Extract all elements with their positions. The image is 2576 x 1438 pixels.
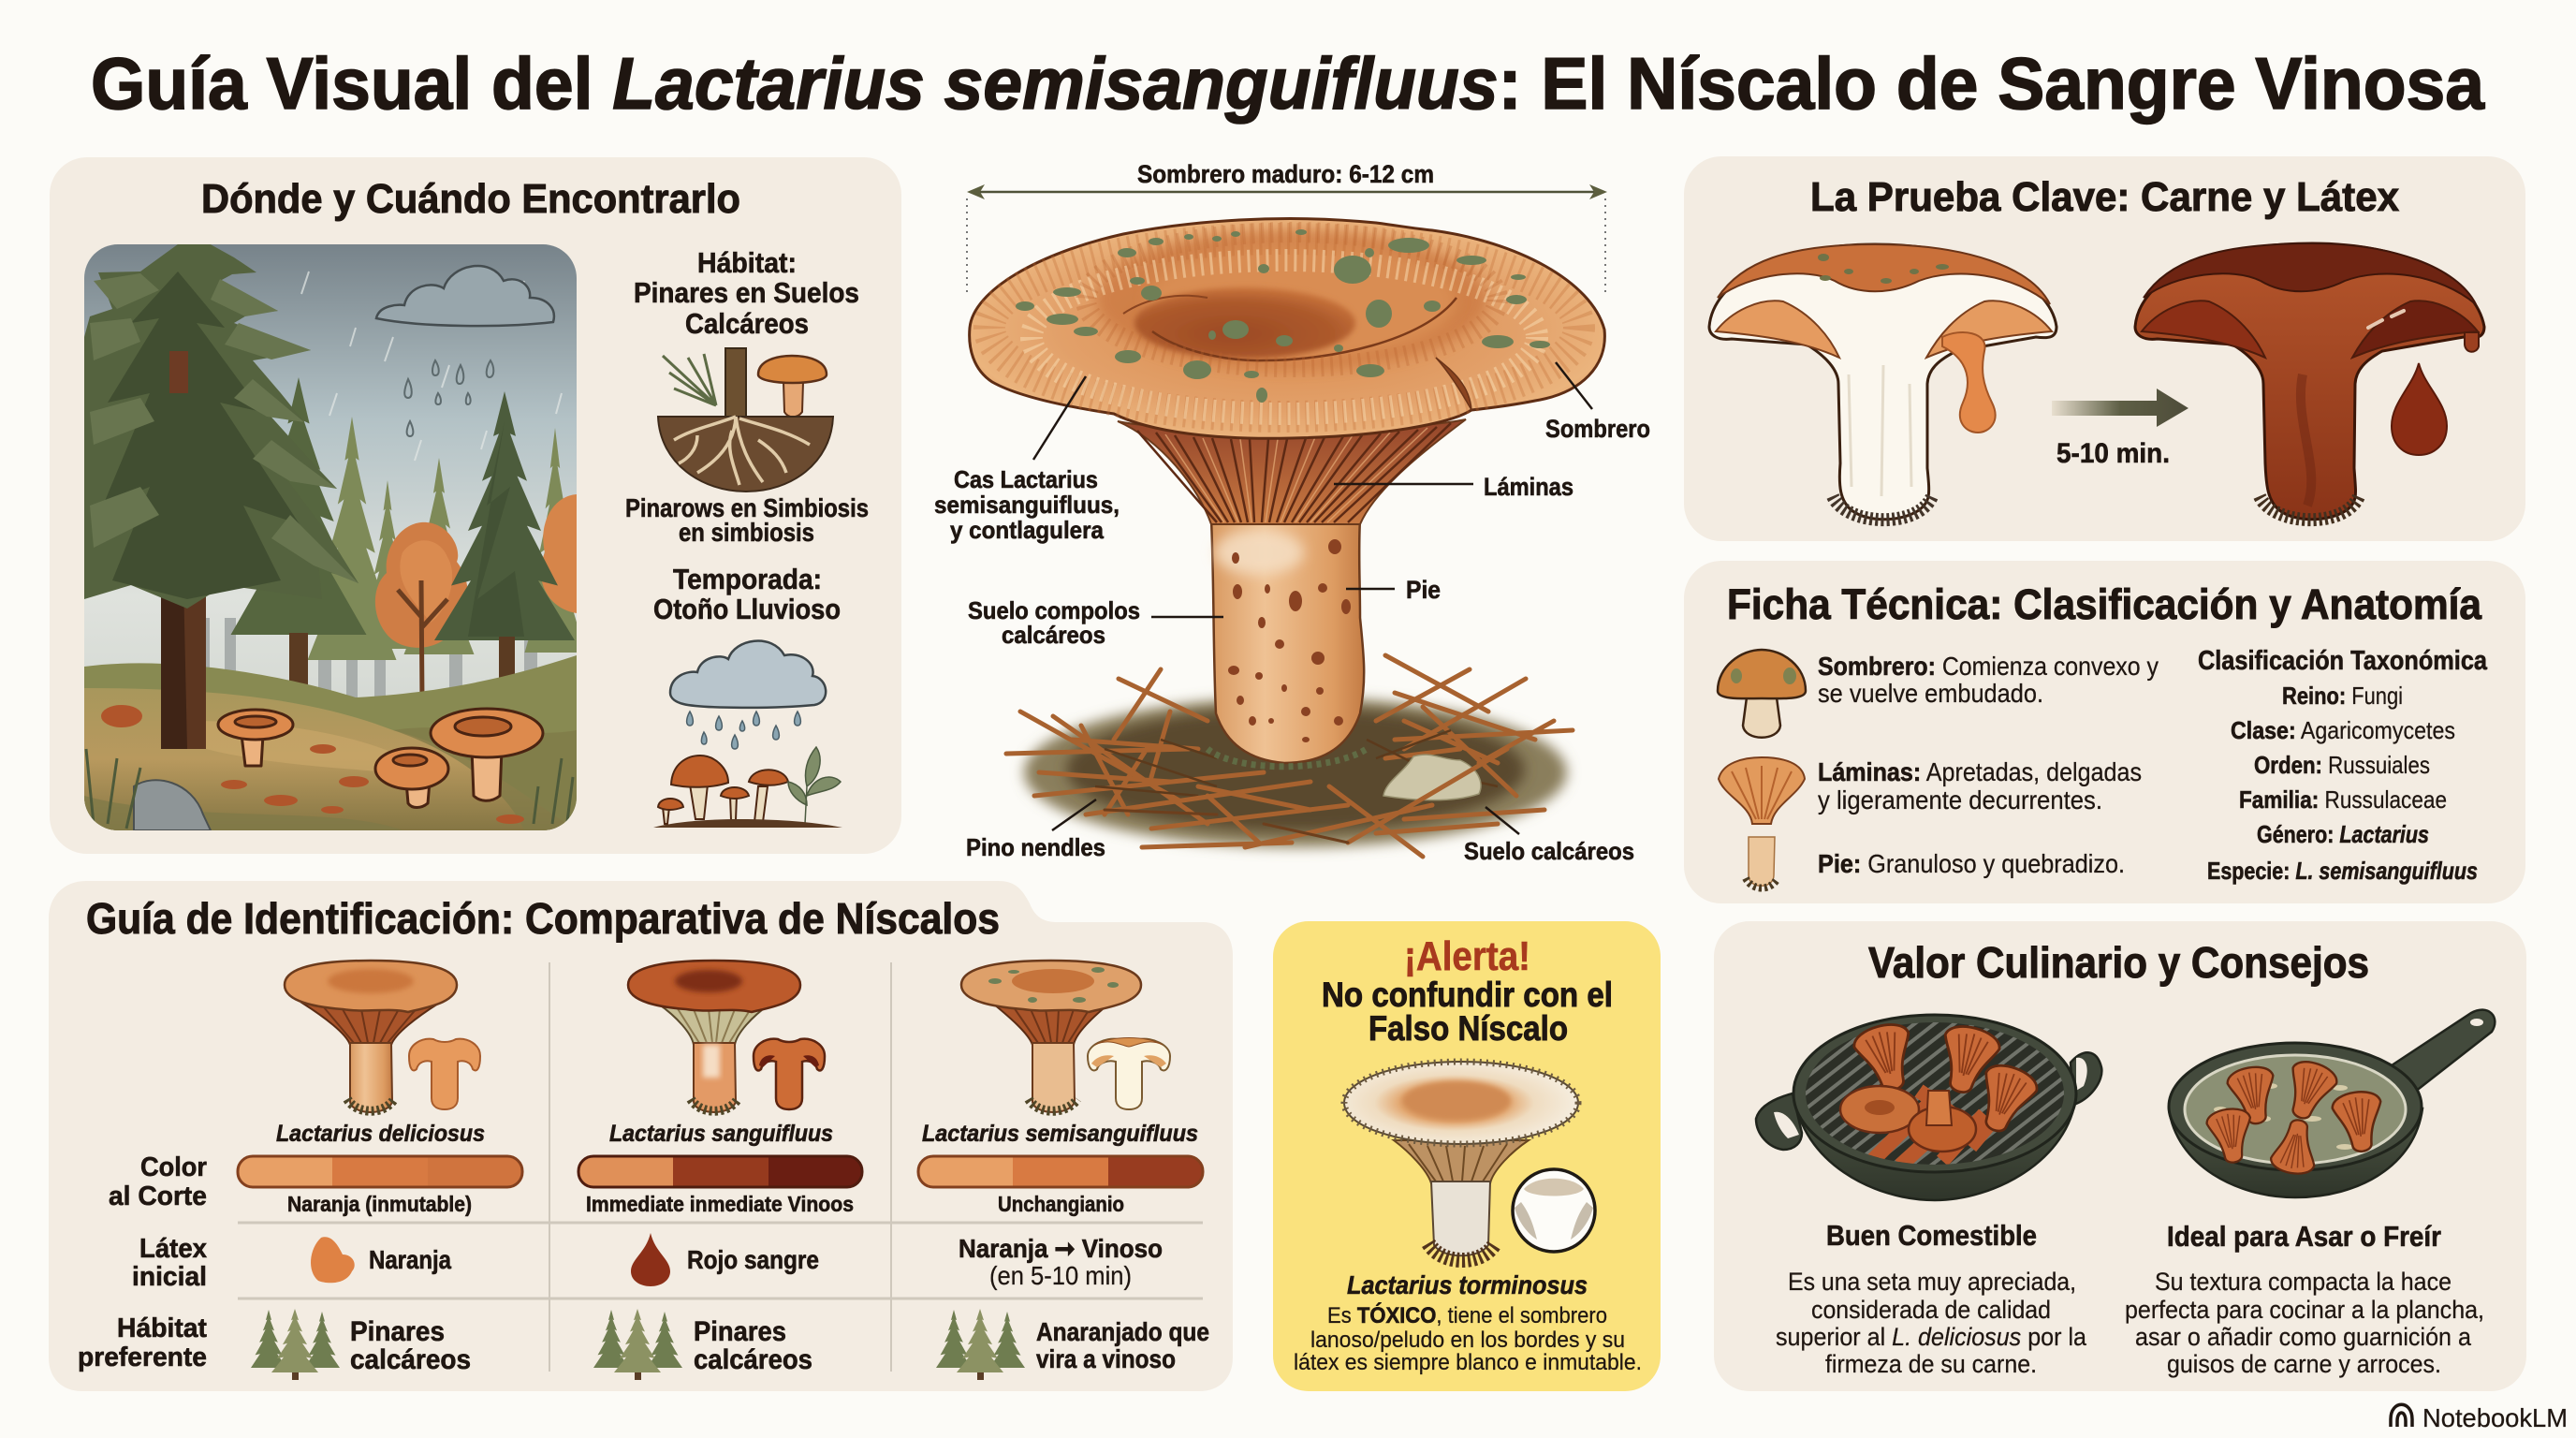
label: suelo compolos: calcáreos — [1002, 621, 1105, 649]
cross-section: sanguifluus — [754, 1039, 825, 1109]
row labels: Hábitat — [117, 1313, 207, 1343]
label: láminas: Láminas — [1484, 473, 1573, 501]
label: sombrero: Sombrero — [1545, 415, 1650, 443]
column: ideal para asar: Su textura compacta la hace — [2155, 1268, 2452, 1296]
foreground pine — [84, 365, 120, 501]
label: pinarows en simbiosis: Pinarows en Simbiosis — [625, 493, 869, 522]
taxonomy list: Especie: L. semisanguifluus — [2207, 857, 2478, 885]
forest mushrooms — [218, 709, 543, 807]
label: hábitat: Hábitat: — [697, 246, 797, 279]
oxidised mushroom — [2135, 243, 2484, 520]
species name: Lactarius sanguifluus — [609, 1121, 833, 1147]
icon: orange latex — [311, 1237, 355, 1283]
label: pinarows en simbiosis: en simbiosis — [679, 518, 814, 547]
cross-section with white latex — [1513, 1169, 1595, 1252]
anatomy text — [1818, 652, 2159, 878]
gills — [1118, 419, 1466, 524]
size dimension line — [967, 160, 1607, 292]
habitat label — [1036, 1317, 1209, 1373]
icon: pines — [593, 1309, 682, 1380]
anatomy text: y ligeramente decurrentes. — [1818, 785, 2102, 814]
label: cas lactarius: y contlagulera — [950, 516, 1104, 544]
alert text: lanoso/peludo en los bordes y su — [1310, 1328, 1625, 1353]
label: hábitat — [634, 246, 859, 340]
autumn tree right edge — [541, 494, 577, 613]
rock and grass — [134, 780, 211, 830]
alert heading — [1322, 933, 1613, 1048]
taxonomy list: Género: Lactarius — [2257, 820, 2429, 848]
panel: guía de identificación — [49, 881, 1233, 1391]
panel: dónde y cuándo — [50, 157, 901, 854]
annotation leader lines — [1033, 362, 1592, 834]
central mushroom diagram — [934, 160, 1650, 865]
label: temporada — [653, 563, 841, 625]
taxonomy list: Reino: Fungi — [2282, 682, 2403, 710]
icon: pie — [1746, 837, 1778, 888]
latex label: Naranja — [369, 1245, 451, 1274]
latex label: Naranja ➞ Vinoso — [959, 1234, 1163, 1263]
icon: rain cloud over mushrooms — [653, 641, 842, 828]
alert heading: No confundir con el — [1322, 976, 1613, 1014]
icon: grill pan with mushrooms — [1756, 1015, 2101, 1200]
heading: valor culinario: Valor Culinario y Consejos — [1868, 938, 2369, 987]
row labels: inicial — [132, 1262, 207, 1292]
heading: dónde y cuándo: Dónde y Cuándo Encontrarlo — [201, 176, 740, 222]
mushroom: lactarius torminosus — [1344, 1062, 1578, 1260]
label: hábitat: Calcáreos — [685, 307, 809, 340]
latex label: (en 5-10 min) — [989, 1261, 1132, 1290]
heading: la prueba clave: La Prueba Clave: Carne y Látex — [1810, 174, 2399, 220]
label: pino nendles: Pino nendles — [966, 833, 1105, 861]
label: 5-10 min: 5-10 min. — [2056, 438, 2170, 469]
panel: ficha técnica — [1684, 561, 2525, 903]
taxonomy list: Familia: Russulaceae — [2239, 785, 2447, 814]
column: ideal para asar: perfecta para cocinar a la plancha, — [2125, 1296, 2484, 1324]
label: pinarows en simbiosis — [625, 493, 869, 547]
icon: soil with roots and mushroom — [658, 348, 833, 492]
mushroom: semisanguifluus — [961, 961, 1141, 1112]
anatomy text: Sombrero: Comienza convexo y — [1818, 652, 2159, 681]
colour bar — [918, 1156, 1203, 1187]
title: Guía Visual del Lactarius semisanguifluus: El Níscalo de Sangre Vinosa — [91, 42, 2485, 125]
caption: Naranja (inmutable) — [287, 1192, 472, 1216]
label: suelo compolos: Suelo compolos — [968, 596, 1140, 624]
taxonomy list: Clasificación Taxonómica — [2198, 646, 2488, 676]
panel: alerta falso níscalo — [1273, 921, 1661, 1391]
wine red latex drop — [2392, 363, 2447, 455]
icon: láminas — [1719, 757, 1805, 824]
column: buen comestible: superior al L. deliciosus por la — [1776, 1323, 2087, 1351]
stipe — [1208, 520, 1367, 767]
taxonomy list: Clase: Agaricomycetes — [2231, 716, 2455, 744]
column: buen comestible: Buen Comestible — [1826, 1219, 2037, 1252]
limestone rock — [1383, 755, 1481, 800]
label: suelo calcáreos: Suelo calcáreos — [1464, 837, 1634, 865]
alert text — [1294, 1270, 1642, 1375]
colour bar — [578, 1156, 862, 1187]
alert text: látex es siempre blanco e inmutable. — [1294, 1350, 1642, 1375]
label: suelo compolos — [968, 596, 1140, 649]
background trunks — [206, 618, 537, 697]
label: cas lactarius: semisanguifluus, — [934, 491, 1120, 519]
back pine — [230, 377, 367, 635]
habitat label: calcáreos — [694, 1344, 812, 1375]
row labels: preferente — [78, 1343, 207, 1372]
caption: Immediate inmediate Vinoos — [586, 1192, 854, 1216]
cross-section: semisanguifluus — [1088, 1037, 1170, 1109]
latex label: Rojo sangre — [687, 1245, 819, 1274]
column: ideal para asar: Ideal para Asar o Freír — [2167, 1220, 2441, 1253]
heading: ficha técnica: Ficha Técnica: Clasificación y Anatomía — [1727, 580, 2482, 628]
label: pie: Pie — [1406, 576, 1441, 604]
foreground needles — [1086, 749, 1544, 857]
cross-section: deliciosus — [409, 1039, 480, 1109]
alert text: Lactarius torminosus — [1347, 1270, 1588, 1299]
label: cas lactarius: Cas Lactarius — [954, 465, 1098, 493]
notebooklm logo: NotebookLM — [2422, 1403, 2568, 1432]
autumn tree — [375, 522, 468, 648]
mushroom: deliciosus — [285, 961, 457, 1112]
heading: guía de identificación: Guía de Identificación: Comparativa de Níscalos — [86, 894, 1000, 943]
habitat label — [694, 1316, 812, 1375]
label: temporada: Otoño Lluvioso — [653, 593, 841, 625]
column: buen comestible: considerada de calidad — [1811, 1296, 2051, 1324]
habitat label: calcáreos — [350, 1344, 471, 1375]
pileus cap — [970, 219, 1604, 438]
row labels: al Corte — [109, 1181, 207, 1211]
taxonomy list: Orden: Russuiales — [2254, 751, 2430, 779]
label: cas lactarius — [934, 465, 1120, 544]
row labels: Color — [140, 1152, 207, 1182]
icon: pines — [251, 1309, 340, 1380]
taxonomy list — [2198, 646, 2488, 885]
habitat label: Pinares — [694, 1316, 786, 1347]
icon: blood red latex — [631, 1233, 670, 1286]
alert heading: Falso Níscalo — [1368, 1009, 1568, 1048]
orange latex drip — [1942, 332, 1996, 433]
forest illustration — [84, 234, 586, 830]
icon: sombrero — [1718, 650, 1806, 738]
habitat label: Anaranjado que — [1036, 1317, 1209, 1346]
alert text: Es TÓXICO, tiene el sombrero — [1327, 1302, 1607, 1328]
latex label — [959, 1234, 1163, 1290]
size dimension line: Sombrero maduro: 6-12 cm — [1137, 160, 1434, 188]
label: temporada: Temporada: — [673, 563, 822, 595]
fresh cut mushroom — [1709, 244, 2056, 520]
colour bar — [238, 1156, 522, 1187]
alert heading: ¡Alerta! — [1404, 933, 1530, 979]
icon: pines — [936, 1309, 1025, 1380]
row labels — [78, 1152, 207, 1372]
label: hábitat: Pinares en Suelos — [634, 276, 859, 309]
habitat label — [350, 1316, 471, 1375]
ground with pine needles — [1006, 655, 1573, 847]
panel: la prueba clave — [1684, 156, 2525, 541]
species name: Lactarius semisanguifluus — [922, 1121, 1198, 1147]
column: lactarius deliciosus — [238, 961, 522, 1380]
habitat label: vira a vinoso — [1036, 1344, 1176, 1373]
right pine — [434, 391, 575, 640]
rain cloud — [376, 266, 554, 326]
column: ideal para asar: asar o añadir como guarnición a — [2135, 1323, 2472, 1351]
column: lactarius semisanguifluus — [918, 961, 1209, 1380]
column: buen comestible — [1776, 1219, 2087, 1378]
column: ideal para asar — [2125, 1220, 2484, 1378]
panel: valor culinario — [1714, 921, 2526, 1391]
habitat label: Pinares — [350, 1316, 445, 1347]
anatomy text: Pie: Granuloso y quebradizo. — [1818, 849, 2125, 878]
anatomy text: Láminas: Apretadas, delgadas — [1818, 757, 2142, 786]
caption: Unchangianio — [998, 1192, 1124, 1216]
icon: skillet with mushrooms — [2169, 1010, 2495, 1197]
arrow: colour change — [2052, 389, 2188, 427]
row labels: Látex — [139, 1234, 207, 1264]
small background pines — [307, 417, 586, 660]
species name: Lactarius deliciosus — [276, 1121, 485, 1147]
column: ideal para asar: guisos de carne y arroces. — [2167, 1350, 2441, 1378]
mushroom: sanguifluus — [628, 961, 800, 1112]
column: buen comestible: firmeza de su carne. — [1825, 1350, 2037, 1378]
ground — [84, 655, 577, 830]
anatomy text: se vuelve embudado. — [1818, 679, 2043, 708]
column: lactarius sanguifluus — [578, 961, 862, 1380]
column: buen comestible: Es una seta muy apreciada, — [1788, 1268, 2076, 1296]
